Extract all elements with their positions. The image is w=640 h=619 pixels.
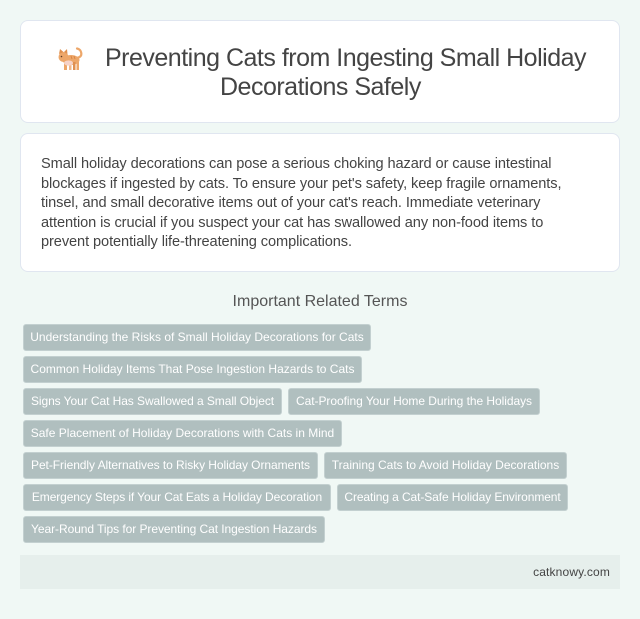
title bbox=[105, 44, 586, 101]
title: Preventing Cats from Ingesting Small Holiday bbox=[105, 44, 586, 72]
tag: Year-Round Tips for Preventing Cat Ingestion Hazards bbox=[31, 522, 317, 536]
paragraph text: Small holiday decorations can pose a serious choking hazard or cause intestinal bbox=[41, 156, 551, 172]
title card bbox=[20, 20, 620, 123]
tag: Pet-Friendly Alternatives to Risky Holiday Ornaments bbox=[31, 458, 310, 472]
tag: Understanding the Risks of Small Holiday Decorations for Cats bbox=[30, 330, 364, 344]
icon: cat bbox=[58, 47, 82, 70]
tag: Emergency Steps if Your Cat Eats a Holiday Decoration bbox=[32, 490, 322, 504]
footer text: catknowy.com bbox=[533, 565, 610, 579]
section heading: Important Related Terms bbox=[233, 293, 407, 310]
tag bbox=[23, 356, 362, 383]
tag: Common Holiday Items That Pose Ingestion Hazards to Cats bbox=[31, 362, 354, 376]
tag: Signs Your Cat Has Swallowed a Small Object bbox=[31, 394, 274, 408]
tag: Creating a Cat-Safe Holiday Environment bbox=[344, 490, 561, 504]
intro paragraph card bbox=[20, 133, 620, 272]
tag bbox=[23, 484, 331, 511]
paragraph text: attention is crucial if you suspect your cat has swallowed any non-food items to bbox=[41, 214, 543, 230]
tag bbox=[23, 324, 371, 351]
tag bbox=[288, 388, 540, 415]
paragraph text bbox=[41, 156, 561, 250]
tag bbox=[324, 452, 567, 479]
tag bbox=[23, 420, 342, 447]
footer bar bbox=[20, 555, 620, 589]
tag: Training Cats to Avoid Holiday Decorations bbox=[332, 458, 559, 472]
paragraph text: tinsel, and small decorative items out of your cat's reach. Immediate veterinary bbox=[41, 195, 540, 211]
tag: Safe Placement of Holiday Decorations with Cats in Mind bbox=[31, 426, 334, 440]
tag bbox=[23, 388, 282, 415]
tag bbox=[23, 516, 325, 543]
tag bbox=[23, 452, 318, 479]
paragraph text: prevent potentially life-threatening complications. bbox=[41, 234, 352, 250]
tag bbox=[337, 484, 568, 511]
paragraph text: blockages if ingested by cats. To ensure your pet's safety, keep fragile ornaments, bbox=[41, 176, 561, 192]
tags list bbox=[23, 324, 568, 543]
title: Decorations Safely bbox=[220, 73, 421, 101]
tag: Cat-Proofing Your Home During the Holidays bbox=[296, 394, 532, 408]
